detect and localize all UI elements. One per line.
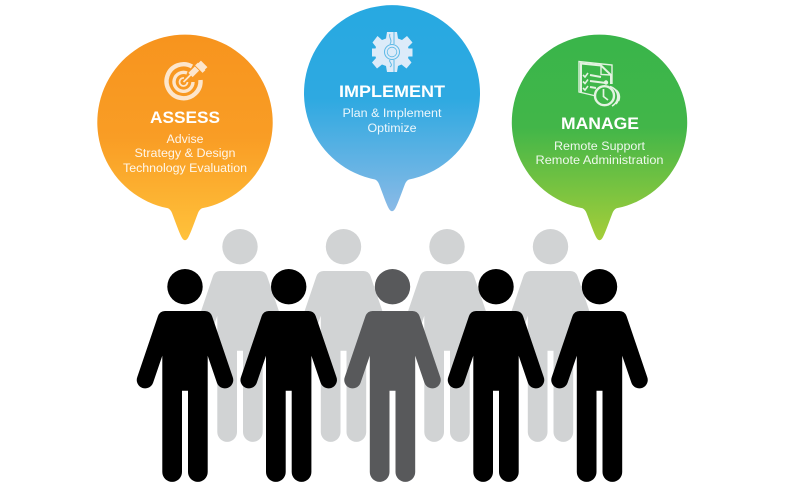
person: black 2 (240, 269, 337, 482)
heading: assess: ASSESS (150, 108, 220, 127)
panel: manage bubble (512, 35, 687, 240)
person: gray 2 (295, 229, 392, 442)
foreground people group (137, 269, 648, 482)
background people group (192, 229, 599, 442)
icon: checklist with stopwatch (579, 62, 619, 106)
text: implement services (342, 106, 442, 135)
person: gray 4 (502, 229, 599, 442)
text: manage services (536, 139, 664, 167)
text: assess services: Technology Evaluation (123, 161, 247, 175)
heading: manage: MANAGE (561, 114, 639, 133)
text: implement services: Plan & Implement (342, 106, 442, 120)
text: manage services: Remote Administration (536, 153, 664, 167)
text: assess services: Advise (166, 132, 204, 146)
heading: implement: IMPLEMENT (339, 82, 446, 101)
text: assess services: Strategy & Design (134, 146, 236, 160)
person: dark gray centre (344, 269, 441, 482)
icon: target with dart (167, 62, 206, 98)
person: black 3 (448, 269, 544, 482)
person: black 1 (137, 269, 233, 482)
person: black 4 (551, 269, 648, 482)
bubble shape: green (512, 35, 687, 240)
text: manage services: Remote Support (554, 139, 646, 153)
bubble shape: orange (97, 35, 273, 240)
text: assess services (123, 132, 247, 175)
panel: implement bubble (304, 5, 480, 211)
panel: assess bubble (97, 35, 273, 240)
bubble shape: blue (304, 5, 480, 211)
text: implement services: Optimize (368, 121, 417, 135)
person: gray 1 (192, 229, 288, 442)
person: gray 3 (399, 229, 495, 442)
icon: gear (372, 32, 412, 72)
